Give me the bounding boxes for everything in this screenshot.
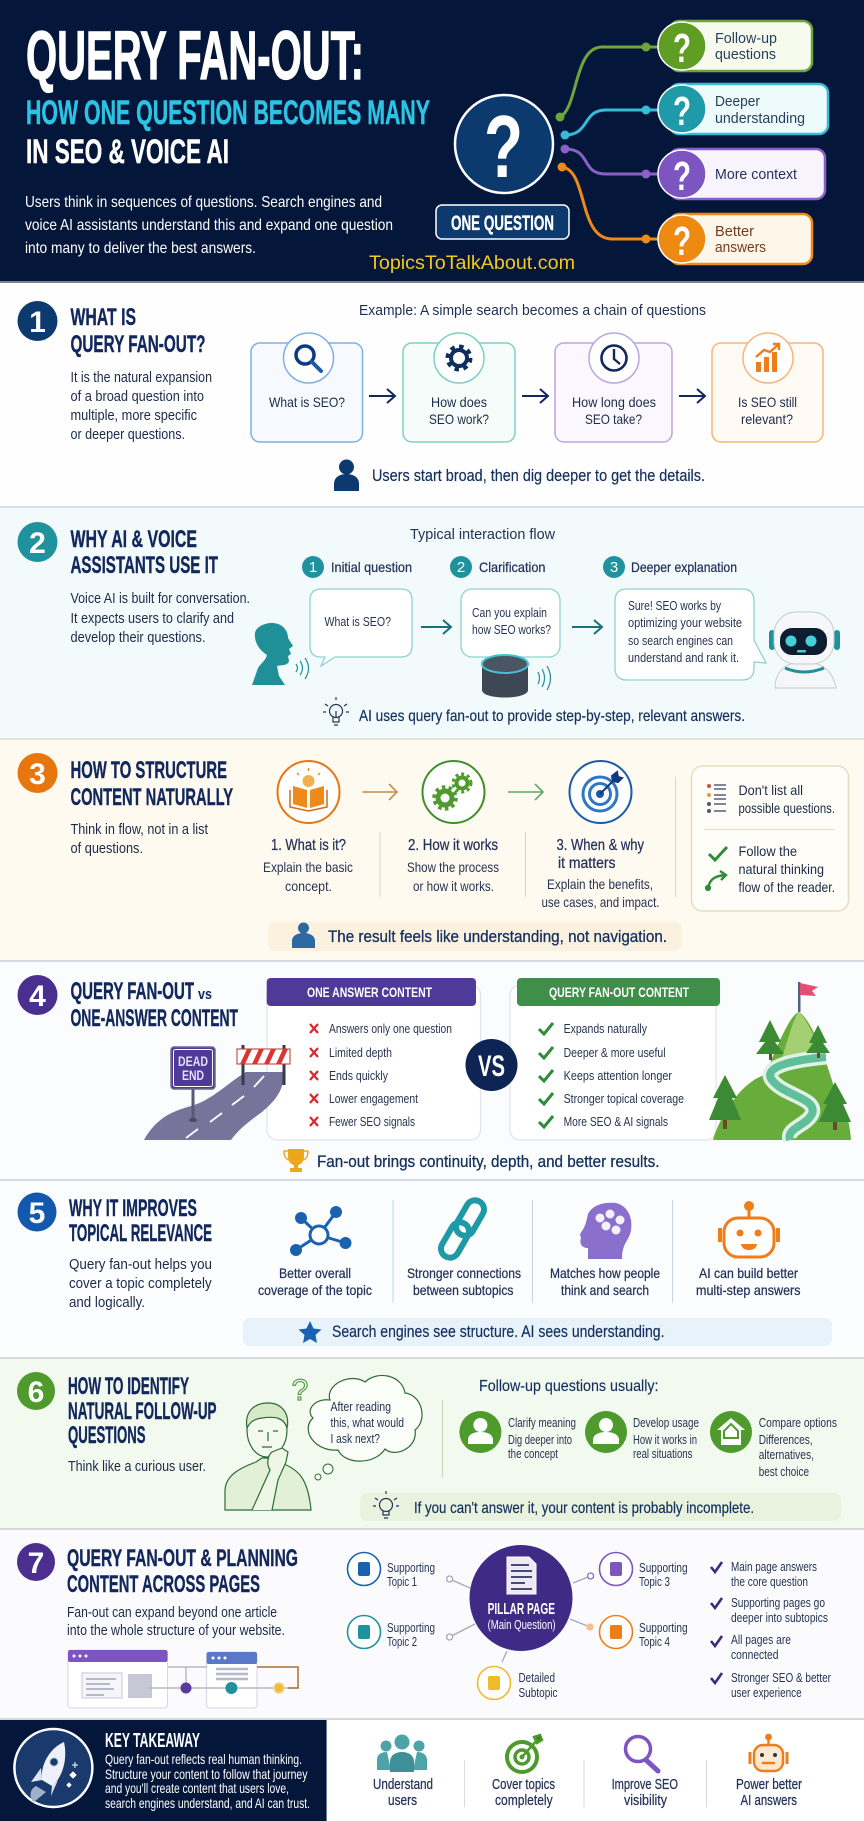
panel: key takeaway [0, 1720, 327, 1821]
callout: search engines see structure [243, 1318, 832, 1346]
checklist: the core question [731, 1574, 808, 1589]
text block 2: Voice AI is built for conversation. [70, 590, 250, 607]
pill: follow-up questions: questions [715, 46, 776, 63]
pill: better answers: answers [715, 239, 766, 256]
topic: supporting 4: Supporting [639, 1620, 688, 1635]
title: IN SEO & VOICE AI [26, 133, 229, 171]
checklist: Main page answers [731, 1559, 817, 1574]
text block 5: cover a topic completely [69, 1275, 212, 1292]
text block 2 [70, 590, 250, 646]
follow-up heading: Follow-up questions usually: [479, 1378, 658, 1395]
text: step how it works: or how it works. [413, 878, 494, 894]
heading 7: CONTENT ACROSS PAGES [67, 1571, 260, 1598]
topic: supporting 4 [600, 1616, 688, 1649]
item: compare options: best choice [759, 1464, 809, 1479]
badge 1 [18, 301, 58, 341]
heading 7: QUERY FAN-OUT & PLANNING [67, 1545, 298, 1572]
icon: speaking head [252, 623, 308, 685]
callout: AI uses query fan-out: AI uses query fan-out to provide step-by-step, relevant answers. [359, 708, 745, 725]
text block 5: and logically. [69, 1294, 145, 1311]
item: compare options [710, 1411, 837, 1479]
flow heading: Typical interaction flow [410, 526, 555, 543]
panel: query fan-out content: More SEO & AI signals [564, 1114, 668, 1129]
text: understand users: users [388, 1792, 417, 1809]
callout: if you can't answer it [360, 1491, 841, 1521]
text: step when and why: 3. When & why [556, 837, 644, 854]
text block 1: or deeper questions. [70, 426, 185, 443]
text block 7 [67, 1604, 285, 1639]
text block 3: of questions. [70, 840, 143, 857]
panel: one answer content [267, 978, 480, 1140]
heading 1: QUERY FAN-OUT? [70, 331, 206, 358]
item: compare options: Compare options [759, 1415, 837, 1430]
heading 2: ASSISTANTS USE IT [70, 552, 218, 579]
text block 1: It is the natural expansion [70, 369, 212, 386]
heading 4: vs [198, 986, 212, 1003]
text: understand users [373, 1776, 433, 1809]
card: how long does SEO take: How long does [572, 394, 656, 410]
panel: section 1 what is query fan-out [0, 283, 864, 508]
panel: section 5 topical relevance [0, 1181, 864, 1359]
VS badge: VS [478, 1050, 505, 1083]
topic: supporting 2: Supporting [387, 1620, 435, 1635]
bubble: what is SEO: What is SEO? [324, 614, 391, 629]
illustration: dead end road: DEAD [178, 1053, 208, 1069]
item: clarify meaning: Clarify meaning [508, 1415, 576, 1430]
badge 5: 5 [29, 1197, 45, 1230]
checklist: All pages are [731, 1632, 791, 1647]
callout: search engines see structure: Search engines see structure. AI sees understanding. [332, 1323, 664, 1341]
checklist: user experience [731, 1685, 802, 1700]
thought bubble: this, what would [330, 1415, 404, 1430]
text: stronger connections: between subtopics [413, 1282, 514, 1298]
heading 1 [70, 304, 206, 358]
panel: advice box: possible questions. [738, 800, 835, 816]
panel: section 2 why AI and voice [0, 508, 864, 740]
pill: deeper understanding: ? [673, 88, 691, 134]
topic: supporting 1: Supporting [387, 1560, 435, 1575]
pill: follow-up questions: ? [673, 25, 691, 71]
icon: people [377, 1734, 427, 1772]
badge 7: 7 [28, 1547, 44, 1580]
panel: section 4 comparison [0, 962, 864, 1181]
panel: one answer content: Fewer SEO signals [329, 1114, 415, 1129]
panel: advice box: Follow the [738, 843, 797, 859]
card: is SEO still relevant: Is SEO still [738, 394, 797, 410]
panel: section 6 identify follow-ups [0, 1359, 864, 1530]
text: better overall coverage: coverage of the topic [258, 1282, 372, 1298]
topic: supporting 3 [600, 1552, 688, 1589]
pill: deeper understanding: Deeper [715, 93, 760, 110]
topic: detailed subtopic: Subtopic [518, 1685, 558, 1700]
card: how does SEO work: How does [431, 394, 487, 410]
card: is SEO still relevant: relevant? [741, 411, 793, 427]
heading 4: QUERY FAN-OUT [70, 978, 194, 1005]
step 1 label: 1 [309, 559, 317, 576]
heading 3 [70, 757, 233, 811]
topic: supporting 1: Topic 1 [387, 1574, 417, 1589]
icon: rocket [14, 1729, 92, 1807]
pill: better answers [658, 214, 812, 264]
header description [25, 194, 393, 257]
text: better overall coverage: Better overall [279, 1265, 351, 1281]
text block 1: of a broad question into [70, 388, 204, 405]
step 3 label [603, 556, 737, 578]
checklist [711, 1559, 832, 1700]
callout: users start broad [334, 460, 705, 491]
text: improve SEO [612, 1776, 678, 1809]
header description: Users think in sequences of questions. Search engines and [25, 194, 382, 211]
card: how does SEO work: SEO work? [429, 411, 489, 427]
pill: follow-up questions [658, 21, 812, 71]
text block 1: multiple, more specific [70, 407, 197, 424]
x marks [310, 1024, 318, 1126]
card: what is SEO [251, 333, 362, 442]
icon: green target [507, 1735, 542, 1772]
check marks [539, 1023, 553, 1127]
icon: big question circle [455, 95, 553, 196]
step 2 label [450, 556, 546, 578]
topic: supporting 4: Topic 4 [639, 1634, 670, 1649]
arrow [508, 784, 543, 800]
text: step what is it [263, 837, 353, 894]
pillar page hub [470, 1545, 572, 1651]
icon: big question circle: ? [484, 97, 523, 196]
topic: supporting 3: Topic 3 [639, 1574, 670, 1589]
heading 2 [70, 526, 218, 579]
text: step how it works: Show the process [407, 859, 499, 875]
icon: target [570, 761, 632, 823]
text: matches how people: think and search [561, 1282, 649, 1298]
pillar page hub: (Main Question) [488, 1617, 556, 1632]
heading 6: HOW TO IDENTIFY [68, 1373, 189, 1400]
item: develop usage [585, 1411, 699, 1461]
text block 7: Fan-out can expand beyond one article [67, 1604, 277, 1621]
arrow [421, 620, 451, 634]
icon: brain head [580, 1203, 631, 1259]
text: AI can build better: multi-step answers [696, 1282, 800, 1298]
item: clarify meaning [459, 1411, 576, 1461]
card: what is SEO: What is SEO? [269, 394, 345, 410]
bubble: sure SEO works by [615, 589, 766, 680]
heading 5: WHY IT IMPROVES [69, 1195, 197, 1222]
card: is SEO still relevant [712, 333, 823, 442]
panel: one answer content: Ends quickly [329, 1068, 388, 1083]
item: develop usage: real situations [633, 1446, 693, 1461]
icon: magnifier [626, 1736, 658, 1771]
thought bubble: I ask next? [330, 1431, 380, 1446]
panel: one answer content: Limited depth [329, 1045, 392, 1060]
badge 1: 1 [29, 306, 46, 339]
pill: better answers: ? [673, 218, 691, 264]
callout: result feels like understanding [268, 922, 682, 951]
card: how long does SEO take: SEO take? [585, 411, 642, 427]
panel: footer benefits [327, 1720, 864, 1821]
one question label: ONE QUESTION [451, 212, 554, 235]
text: power better [736, 1776, 802, 1809]
text: stronger connections: Stronger connections [407, 1265, 521, 1281]
text: step what is it: Explain the basic [263, 859, 353, 875]
badge 4: 4 [29, 980, 46, 1013]
panel: one answer content: Lower engagement [329, 1091, 418, 1106]
text: improve SEO: Improve SEO [612, 1776, 678, 1793]
step 1 label: Initial question [331, 559, 412, 575]
text block 5: Query fan-out helps you [69, 1256, 212, 1273]
step 3 label: Deeper explanation [631, 559, 737, 575]
panel: section 3 how to structure [0, 740, 864, 962]
panel: one answer content: ONE ANSWER CONTENT [307, 984, 432, 1000]
text: matches how people [550, 1265, 660, 1298]
illustration: dead end road [144, 1045, 290, 1140]
bubble: can you explain: Can you explain [472, 605, 547, 620]
takeaway text: Query fan-out reflects real human thinking. [105, 1751, 302, 1767]
panel: query fan-out content [510, 978, 720, 1140]
bubble: can you explain: how SEO works? [472, 622, 551, 637]
checklist: deeper into subtopics [731, 1610, 828, 1625]
panel: advice box: Don't list all [738, 782, 803, 798]
heading 3: CONTENT NATURALLY [70, 784, 233, 811]
illustration: thinking person [225, 1403, 311, 1510]
bubble: sure SEO works by: understand and rank it. [628, 650, 739, 665]
badge 2: 2 [29, 527, 46, 560]
item: clarify meaning: the concept [508, 1446, 558, 1461]
thought bubble [308, 1375, 422, 1480]
heading 5: TOPICAL RELEVANCE [69, 1220, 212, 1247]
icon: book and bulb [278, 761, 340, 823]
text: step how it works: 2. How it works [408, 837, 498, 854]
item: clarify meaning: Dig deeper into [508, 1432, 572, 1447]
takeaway text: Structure your content to follow that journey [105, 1766, 308, 1782]
text block 3 [70, 821, 209, 857]
text: cover topics [492, 1776, 555, 1809]
text: step what is it: concept. [285, 878, 332, 894]
badge 3 [18, 753, 58, 793]
pill: more context: More context [715, 166, 798, 183]
text: step when and why: it matters [558, 855, 616, 872]
panel: advice box: flow of the reader. [738, 879, 835, 895]
one question label [436, 205, 569, 239]
bubble: sure SEO works by: so search engines can [628, 633, 733, 648]
panel: advice box [692, 766, 848, 911]
title [26, 17, 430, 171]
callout: fan-out brings continuity [284, 1149, 660, 1172]
text: matches how people: Matches how people [550, 1265, 660, 1281]
header description: voice AI assistants understand this and expand one question [25, 217, 393, 234]
icon: smart speaker [482, 655, 550, 698]
topic: detailed subtopic: Detailed [518, 1670, 555, 1685]
arrow [362, 784, 397, 800]
badge 4 [18, 975, 58, 1015]
takeaway text [105, 1730, 310, 1811]
bubble: sure SEO works by: Sure! SEO works by [628, 598, 721, 613]
icon: network [290, 1206, 351, 1256]
topic: supporting 2: Topic 2 [387, 1634, 417, 1649]
step 2 label: 2 [457, 559, 465, 576]
heading 5 [69, 1195, 212, 1247]
card: how long does SEO take [555, 333, 672, 442]
arrow [572, 620, 602, 634]
item: compare options: alternatives, [759, 1447, 814, 1462]
icon: robot [769, 612, 840, 688]
icon: question mark: ? [292, 1374, 308, 1407]
topic: supporting 3: Supporting [639, 1560, 688, 1575]
panel: advice box: natural thinking [738, 861, 824, 877]
item: compare options: Differences, [759, 1432, 813, 1447]
item: develop usage: Develop usage [633, 1415, 699, 1430]
badge 6 [17, 1372, 55, 1410]
text block 3: Think in flow, not in a list [70, 821, 209, 838]
topic: supporting 2 [348, 1616, 435, 1649]
icon: gears [422, 761, 484, 823]
heading 6: QUESTIONS [68, 1422, 146, 1449]
icon: list [707, 784, 726, 813]
step 2 label: Clarification [479, 559, 546, 575]
takeaway text: and you'll create content that users love, [105, 1780, 289, 1796]
illustration: mountain path [709, 982, 851, 1140]
icon: check and curved arrow [706, 847, 727, 890]
icon: chain link [438, 1197, 487, 1261]
text block 6: Think like a curious user. [68, 1458, 206, 1475]
arrow [522, 389, 548, 403]
checklist: Supporting pages go [731, 1595, 825, 1610]
text: step when and why [542, 837, 660, 910]
text: power better: AI answers [740, 1792, 797, 1809]
callout: if you can't answer it: If you can't answer it, your content is probably incomplete. [414, 1500, 754, 1517]
heading 1: WHAT IS [70, 304, 136, 331]
title: HOW ONE QUESTION BECOMES MANY [26, 94, 430, 132]
text: step how it works [407, 837, 499, 894]
text block 5 [69, 1256, 212, 1311]
panel: query fan-out content: QUERY FAN-OUT CONTENT [549, 984, 689, 1000]
bubble: can you explain [461, 589, 560, 657]
checklist: connected [731, 1647, 778, 1662]
badge 3: 3 [29, 758, 46, 791]
icon: robot face [750, 1735, 787, 1771]
illustration: dead end road: END [182, 1067, 204, 1083]
pill: deeper understanding [658, 84, 828, 134]
heading 4 [70, 978, 238, 1032]
callout: fan-out brings continuity: Fan-out brings continuity, depth, and better results. [317, 1153, 660, 1171]
badge 2 [18, 522, 58, 562]
website credit: TopicsToTalkAbout.com [369, 253, 575, 274]
text: better overall coverage [258, 1265, 372, 1298]
text: step when and why: Explain the benefits, [547, 876, 653, 892]
header description: into many to deliver the best answers. [25, 240, 256, 257]
panel: query fan-out content: Expands naturally [564, 1021, 647, 1036]
item: develop usage: How it works in [633, 1432, 697, 1447]
text: understand users: Understand [373, 1776, 433, 1793]
panel: section 7 planning across pages [0, 1530, 864, 1720]
text: cover topics: Cover topics [492, 1776, 555, 1793]
icon: orange robot [720, 1202, 778, 1257]
title: QUERY FAN-OUT: [26, 17, 364, 94]
topic: detailed subtopic [478, 1666, 558, 1700]
callout: users start broad: Users start broad, then dig deeper to get the details. [372, 467, 705, 485]
text: stronger connections [407, 1265, 521, 1298]
takeaway text: KEY TAKEAWAY [105, 1730, 200, 1752]
panel: one answer content: Answers only one question [329, 1021, 452, 1036]
panel: header [0, 0, 864, 283]
pill: more context [658, 149, 825, 199]
text: power better: Power better [736, 1776, 802, 1793]
bubble: sure SEO works by: optimizing your website [628, 615, 742, 630]
panel: query fan-out content: Stronger topical coverage [564, 1091, 684, 1106]
card: how does SEO work [403, 333, 515, 442]
text block 2: It expects users to clarify and [70, 610, 234, 627]
text: step when and why: use cases, and impact. [542, 894, 660, 910]
VS badge [466, 1039, 518, 1091]
callout: result feels like understanding: The result feels like understanding, not navigation. [328, 928, 667, 946]
topic: supporting 1 [348, 1552, 435, 1589]
example heading: Example: A simple search becomes a chain of questions [359, 302, 706, 319]
heading 2: WHY AI & VOICE [70, 526, 197, 553]
text: AI can build better [696, 1265, 800, 1298]
pill: follow-up questions: Follow-up [715, 30, 777, 47]
callout: AI uses query fan-out [323, 697, 745, 725]
heading 4: ONE-ANSWER CONTENT [70, 1005, 238, 1032]
thought bubble: After reading [330, 1399, 391, 1414]
arrow [679, 389, 705, 403]
text: cover topics: completely [495, 1792, 553, 1809]
heading 6 [68, 1373, 216, 1449]
badge 7 [17, 1543, 55, 1581]
diagram: linked pages [68, 1650, 299, 1708]
panel: query fan-out content: Deeper & more useful [564, 1045, 666, 1060]
arrow [369, 389, 395, 403]
checklist: Stronger SEO & better [731, 1670, 832, 1685]
pillar page hub: PILLAR PAGE [488, 1601, 555, 1618]
text: AI can build better: AI can build better [699, 1265, 798, 1281]
pill: more context: ? [673, 153, 691, 199]
heading 3: HOW TO STRUCTURE [70, 757, 227, 784]
badge 5 [18, 1192, 56, 1232]
connectors [556, 42, 660, 244]
text block 2: develop their questions. [70, 629, 206, 646]
heading 6: NATURAL FOLLOW-UP [68, 1398, 216, 1425]
heading 7 [67, 1545, 298, 1598]
text block 1 [70, 369, 212, 443]
bubble: what is SEO [310, 589, 412, 666]
step 1 label [302, 556, 412, 578]
step 3 label: 3 [610, 559, 618, 576]
connectors to pillar [447, 1573, 594, 1662]
text: improve SEO: visibility [624, 1792, 667, 1809]
pill: deeper understanding: understanding [715, 110, 805, 127]
text block 7: into the whole structure of your website. [67, 1622, 285, 1639]
pill: better answers: Better [715, 223, 754, 240]
panel: query fan-out content: Keeps attention longer [564, 1068, 673, 1083]
badge 6: 6 [28, 1376, 44, 1409]
takeaway text: search engines understand, and AI can trust. [105, 1795, 310, 1811]
text: step what is it: 1. What is it? [271, 837, 346, 854]
